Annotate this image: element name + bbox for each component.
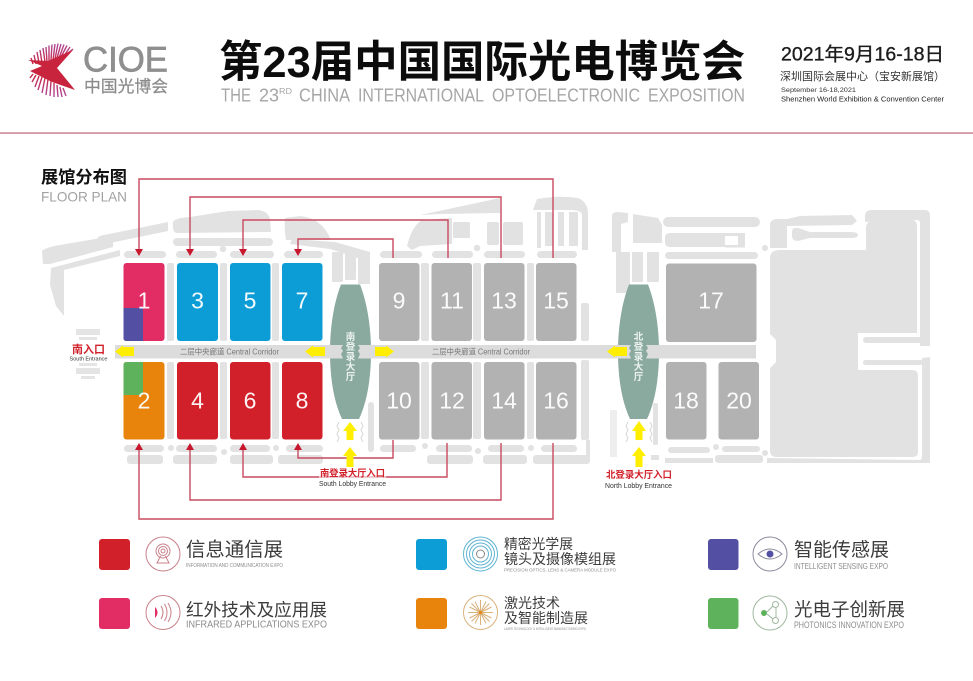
legend: information and communication: 信息通信展 (186, 539, 283, 561)
hall 7: 7 (296, 288, 308, 314)
central corridor band (115, 345, 756, 358)
legend: information and communication: INFORMATION AND COMMUNICATION EXPO (186, 563, 283, 569)
legend: photonics innovation: 光电子创新展 (794, 599, 905, 620)
english subtitle: RD (279, 87, 292, 96)
north lobby entrance label (605, 469, 672, 490)
english subtitle (221, 84, 745, 106)
hall 18: 18 (673, 388, 699, 414)
legend: information and communication (99, 537, 283, 571)
hall 18 (666, 362, 706, 440)
floor plan background: building outline (42, 197, 930, 464)
halls west wing (124, 263, 322, 440)
legend: intelligent sensing: 智能传感展 (794, 539, 889, 561)
hall 12: 12 (439, 388, 465, 414)
hall 2 (124, 362, 164, 440)
hall 3: 3 (191, 288, 204, 314)
hall 17 (666, 264, 756, 342)
north lobby: 录 (634, 351, 644, 363)
north lobby entrance label: 北登录大厅入口 (606, 469, 672, 481)
corridor labels: 二层中央廊道 Central Corridor (180, 346, 279, 356)
hall 14: 14 (491, 388, 517, 414)
legend: photonics innovation: PHOTONICS INNOVATION EXPO (794, 620, 904, 630)
legend: precision optics: 精密光学展 (504, 536, 573, 552)
hall 9: 9 (393, 288, 405, 314)
logo chinese name: 中国光博会 (84, 77, 168, 96)
south lobby entrance label: South Lobby Entrance (319, 481, 386, 488)
hall 12 (432, 362, 472, 440)
hall 2: 2 (138, 388, 150, 414)
hall 11 (432, 263, 472, 341)
legend: precision optics: PRECISION OPTICS, LENS & CAMERA MODULE EXPO (504, 568, 616, 572)
hall 6: 6 (244, 388, 256, 414)
english subtitle: OPTOELECTRONIC (492, 84, 640, 106)
hall 1 (124, 263, 164, 341)
floor plan heading: 展馆分布图 (41, 167, 127, 187)
halls east wing (666, 264, 759, 440)
south lobby: 登 (346, 341, 356, 353)
hall 7 (282, 263, 322, 341)
south lobby: 录 (346, 351, 356, 363)
icon: lens (464, 537, 498, 571)
yellow lobby entrance arrows (343, 421, 646, 467)
south lobby entrance label: 南登录大厅入口 (320, 468, 385, 480)
icon: laser burst (464, 596, 498, 630)
transfer route lines (135, 179, 553, 519)
hall 6 (230, 362, 270, 440)
legend: intelligent sensing (708, 537, 889, 571)
hall 10 (379, 362, 420, 440)
south lobby: 南 (346, 331, 355, 343)
hall 20 (718, 362, 759, 440)
date and venue: 2021年9月16-18日 (781, 44, 944, 66)
north lobby: 大 (634, 361, 644, 373)
corridor labels: 二层中央廊道 Central Corridor (432, 346, 530, 356)
date and venue (780, 44, 945, 104)
english subtitle: THE (221, 84, 251, 106)
corridor labels (180, 346, 530, 356)
hall 16: 16 (543, 388, 569, 414)
lobby steps squiggles (337, 422, 652, 442)
hall 11: 11 (440, 288, 464, 314)
legend: precision optics (416, 536, 616, 572)
legend: laser technology: 及智能制造展 (504, 610, 588, 626)
north lobby: 北 (634, 331, 644, 343)
hall 1: 1 (138, 288, 150, 314)
legend: photonics innovation (708, 596, 905, 630)
icon: infrared waves (146, 596, 180, 630)
english subtitle: 23 (259, 84, 279, 106)
south entrance label: 南入口 (72, 343, 105, 356)
hall 5 (230, 263, 270, 341)
legend: laser technology: LASER TECHNOLOGY & INTELLIGENT MANUFACTURING EXPO (504, 627, 586, 631)
hall 4: 4 (191, 388, 204, 414)
south lobby entrance label (319, 468, 386, 488)
hall 10: 10 (386, 388, 412, 414)
logo mark (28, 44, 75, 97)
north lobby entrance label: North Lobby Entrance (605, 483, 672, 490)
logo (28, 40, 168, 97)
halls central wing (379, 263, 576, 440)
title: 第23届中国国际光电博览会 (219, 39, 745, 87)
south lobby (322, 284, 375, 419)
hall 16 (536, 362, 576, 440)
route arrowheads top (135, 249, 302, 256)
north lobby (610, 284, 663, 419)
english subtitle: EXPOSITION (648, 84, 745, 106)
legend: laser technology (416, 595, 588, 631)
english subtitle: INTERNATIONAL (358, 84, 484, 106)
legend: laser technology: 激光技术 (504, 595, 560, 611)
south entrance label: South Entrance (70, 356, 107, 362)
legend: intelligent sensing: INTELLIGENT SENSING EXPO (794, 562, 888, 571)
south lobby: 大 (346, 361, 356, 373)
icon: eye (753, 537, 787, 571)
legend: infrared applications (99, 596, 327, 630)
hall 15: 15 (543, 288, 569, 314)
hall 3 (177, 263, 218, 341)
hall 17: 17 (698, 288, 724, 314)
hall 9 (379, 263, 420, 341)
logo wordmark: CIOE (83, 40, 168, 80)
date and venue: 深圳国际会展中心（宝安新展馆） (780, 69, 945, 83)
south entrance building detail (76, 329, 100, 379)
legend: infrared applications: 红外技术及应用展 (186, 600, 327, 620)
north lobby: 登 (634, 341, 644, 353)
hall 15 (536, 263, 576, 341)
date and venue: September 16-18,2021 (781, 87, 856, 94)
north lobby: 厅 (634, 372, 644, 383)
legend: infrared applications: INFRARED APPLICATIONS EXPO (186, 620, 327, 630)
south lobby: 厅 (346, 372, 356, 383)
south entrance label (70, 343, 107, 362)
hall 13: 13 (491, 288, 517, 314)
date and venue: Shenzhen World Exhibition & Convention Center (781, 95, 945, 104)
header (28, 39, 945, 106)
legend: precision optics: 镜头及摄像模组展 (504, 551, 616, 567)
hall 13 (484, 263, 524, 341)
hall 4 (177, 362, 218, 440)
hall 5: 5 (244, 288, 256, 314)
icon: network nodes (753, 596, 787, 630)
icon: signal tower (146, 537, 180, 571)
hall 8: 8 (296, 388, 308, 414)
floor plan heading: FLOOR PLAN (41, 188, 127, 204)
hall 8 (282, 362, 322, 440)
hall 14 (484, 362, 524, 440)
yellow corridor arrows (115, 346, 627, 358)
english subtitle: CHINA (299, 84, 351, 106)
route arrowheads bottom (135, 443, 302, 450)
floor plan heading (41, 167, 127, 204)
hall 20: 20 (726, 388, 752, 414)
